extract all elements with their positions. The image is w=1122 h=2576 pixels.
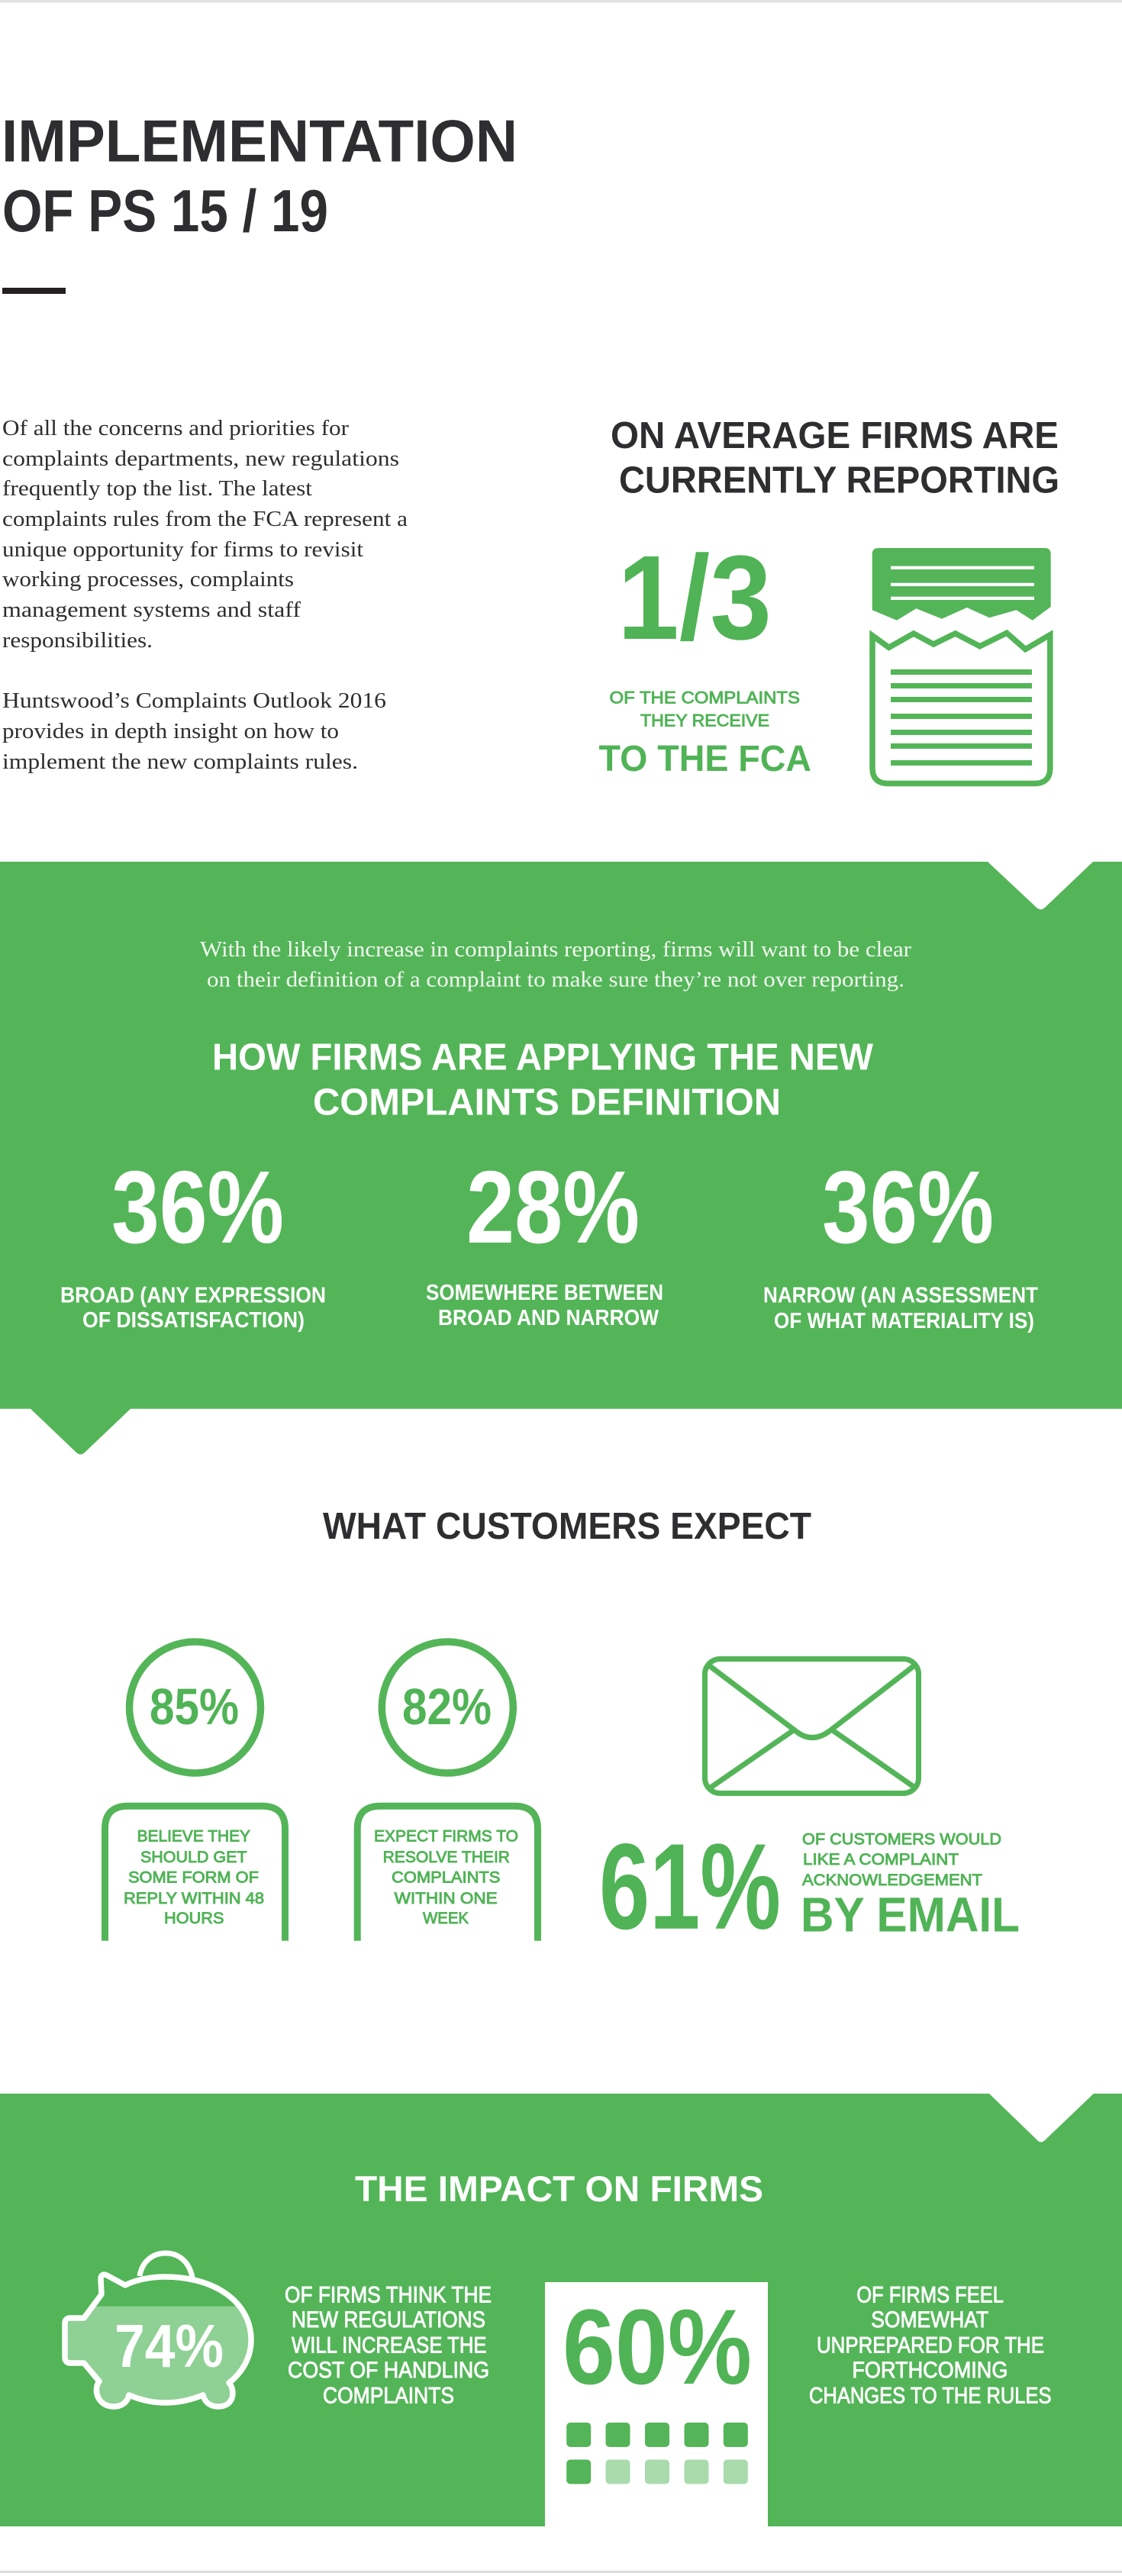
stat: 36% broad: BROAD (ANY EXPRESSION xyxy=(60,1284,326,1308)
stat: 36% narrow: OF WHAT MATERIALITY IS) xyxy=(774,1309,1034,1333)
stat card: 82% resolve within one week: WEEK xyxy=(423,1910,469,1927)
stat: 61% by email: ACKNOWLEDGEMENT xyxy=(802,1872,982,1889)
title: IMPLEMENTATION xyxy=(2,107,517,174)
intro text block: frequently top the list. The latest xyxy=(2,477,312,501)
caption: of the complaints they receive to the FCA: TO THE FCA xyxy=(598,738,811,779)
heading: HOW FIRMS ARE APPLYING THE NEW xyxy=(212,1037,874,1078)
stat: one third: 1/3 xyxy=(617,531,772,665)
intro text block: provides in depth insight on how to xyxy=(2,720,339,743)
intro text block: working processes, complaints xyxy=(2,568,294,592)
heading: on average firms: CURRENTLY REPORTING xyxy=(619,459,1059,501)
icon: envelope xyxy=(705,1659,919,1794)
stat card: 82% resolve within one week: WITHIN ONE xyxy=(395,1890,498,1907)
intro text block: implement the new complaints rules. xyxy=(2,750,358,774)
stat: 61% by email: LIKE A COMPLAINT xyxy=(803,1851,959,1868)
text: somewhat unprepared: CHANGES TO THE RULES xyxy=(809,2384,1052,2409)
stat: 36% broad: OF DISSATISFACTION) xyxy=(82,1308,305,1333)
icon: piggy bank with 74% xyxy=(65,2253,251,2407)
stat: 61% by email: 61% xyxy=(599,1818,781,1955)
stat: 61% by email xyxy=(599,1818,1020,1955)
text: somewhat unprepared: FORTHCOMING xyxy=(852,2358,1008,2383)
stat card: 82% resolve within one week xyxy=(357,1642,537,1941)
stat card: 85% reply within 48 hours: HOURS xyxy=(164,1910,224,1927)
stat card: 82% resolve within one week: RESOLVE THEIR xyxy=(383,1849,510,1866)
caption: of the complaints they receive to the FCA xyxy=(598,688,811,779)
intro text block: complaints departments, new regulations xyxy=(2,447,399,471)
stat: 36% broad: 36% xyxy=(111,1149,284,1265)
text: somewhat unprepared: UNPREPARED FOR THE xyxy=(817,2333,1044,2358)
stat card: 85% reply within 48 hours: 85% xyxy=(150,1678,239,1736)
panel: how firms are applying the definition xyxy=(0,862,1122,1455)
text: cost of handling complaints xyxy=(285,2283,492,2409)
heading xyxy=(212,1037,874,1124)
intro text block: unique opportunity for firms to revisit xyxy=(2,538,363,562)
panel: the impact on firms xyxy=(0,2094,1122,2526)
text: cost of handling complaints: OF FIRMS THINK THE xyxy=(285,2283,492,2308)
caption: of the complaints they receive to the FCA: OF THE COMPLAINTS xyxy=(609,688,800,707)
intro sentence: With the likely increase in complaints reporting, firms will want to be clear xyxy=(200,938,912,962)
title rule xyxy=(2,288,66,294)
white card: 60% with square grid xyxy=(545,2282,768,2526)
title: OF PS 15 / 19 xyxy=(2,177,328,244)
text: somewhat unprepared: OF FIRMS FEEL xyxy=(856,2283,1004,2308)
white card: 60% with square grid: 60% xyxy=(563,2287,752,2407)
stat: 28% between xyxy=(426,1149,663,1330)
text: cost of handling complaints: COMPLAINTS xyxy=(323,2384,454,2409)
stat: 36% narrow: 36% xyxy=(822,1149,994,1265)
text: somewhat unprepared: SOMEWHAT xyxy=(871,2307,988,2333)
intro text block: complaints rules from the FCA represent a xyxy=(2,508,408,531)
intro text block: management systems and staff xyxy=(2,598,301,622)
stat card: 85% reply within 48 hours: REPLY WITHIN 48 xyxy=(124,1890,264,1907)
heading: what customers expect: WHAT CUSTOMERS EXPECT xyxy=(323,1506,811,1547)
heading: on average firms xyxy=(611,415,1059,501)
stat: 28% between: BROAD AND NARROW xyxy=(438,1306,659,1330)
text: cost of handling complaints: NEW REGULATIONS xyxy=(292,2307,485,2333)
intro text block: responsibilities. xyxy=(2,629,153,653)
heading: COMPLAINTS DEFINITION xyxy=(313,1082,781,1124)
intro text block xyxy=(2,417,408,774)
stat: 61% by email: OF CUSTOMERS WOULD xyxy=(802,1831,1001,1849)
text: cost of handling complaints: COST OF HANDLING xyxy=(288,2358,489,2383)
heading: on average firms: ON AVERAGE FIRMS ARE xyxy=(611,415,1059,456)
caption: of the complaints they receive to the FCA: THEY RECEIVE xyxy=(640,711,769,730)
title xyxy=(2,107,517,244)
intro sentence: on their definition of a complaint to make sure they’re not over reporting. xyxy=(207,969,904,992)
stat card: 85% reply within 48 hours: BELIEVE THEY xyxy=(137,1828,250,1846)
icon: piggy bank with 74%: 74% xyxy=(114,2312,224,2380)
stat card: 85% reply within 48 hours xyxy=(105,1642,285,1941)
stat card: 85% reply within 48 hours: SOME FORM OF xyxy=(128,1869,259,1887)
stat: 36% broad xyxy=(60,1149,326,1333)
heading: THE IMPACT ON FIRMS xyxy=(355,2168,763,2209)
stat: 61% by email: BY EMAIL xyxy=(801,1888,1020,1942)
stat: 28% between: 28% xyxy=(466,1149,640,1265)
intro text block: Huntswood’s Complaints Outlook 2016 xyxy=(2,689,386,713)
icon: torn document xyxy=(872,548,1051,783)
stat card: 82% resolve within one week: EXPECT FIRMS TO xyxy=(374,1828,518,1846)
text: somewhat unprepared xyxy=(809,2283,1052,2409)
intro sentence xyxy=(200,938,912,992)
stat card: 82% resolve within one week: COMPLAINTS xyxy=(392,1869,500,1887)
stat card: 85% reply within 48 hours: SHOULD GET xyxy=(140,1849,247,1866)
stat: 36% narrow: NARROW (AN ASSESSMENT xyxy=(763,1284,1038,1308)
stat card: 82% resolve within one week: 82% xyxy=(402,1678,492,1736)
intro text block: Of all the concerns and priorities for xyxy=(2,417,350,440)
text: cost of handling complaints: WILL INCREASE THE xyxy=(292,2333,487,2358)
stat: 36% narrow xyxy=(763,1149,1038,1333)
stat: 28% between: SOMEWHERE BETWEEN xyxy=(426,1281,663,1305)
